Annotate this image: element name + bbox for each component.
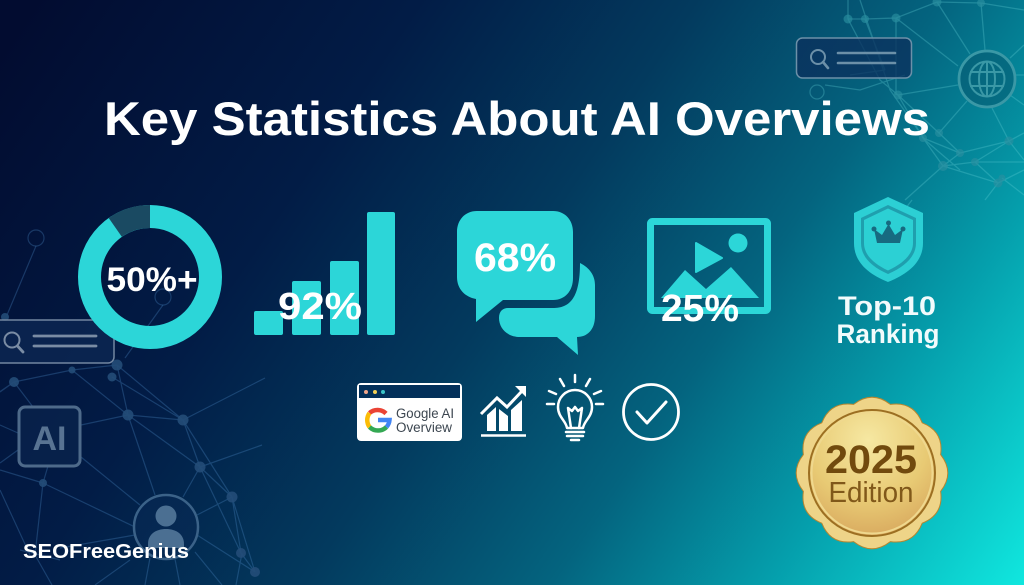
network: lower left	[0, 230, 265, 585]
stat: 68% speech bubbles: 68%	[474, 236, 556, 280]
search bar: left	[0, 320, 114, 363]
network: upper right	[810, 0, 1024, 222]
AI chip icon	[19, 407, 80, 466]
stat: top-10 ranking shield: Ranking	[836, 319, 940, 349]
icon: light bulb	[547, 375, 603, 440]
badge: 2025 Edition: 2025	[825, 438, 917, 482]
stat: 25% image frame	[650, 222, 768, 330]
stat: top-10 ranking shield	[836, 197, 940, 349]
badge: 2025 Edition: Edition	[828, 477, 914, 509]
stat: 50%+ donut: 50%+	[106, 261, 198, 299]
badge: 2025 Edition	[796, 397, 948, 549]
stat: 92% bar chart: 92%	[278, 286, 362, 328]
brand name: SEOFreeGenius	[23, 541, 189, 563]
icon: Google AI Overview card: Google AI	[396, 406, 454, 421]
icon: check circle	[624, 384, 678, 440]
stat: 25% image frame: 25%	[661, 288, 739, 330]
stat: 68% speech bubbles	[457, 211, 595, 355]
icon: Google AI Overview card	[357, 383, 462, 441]
globe icon	[959, 51, 1015, 107]
AI chip icon: AI	[32, 420, 66, 458]
stat: 92% bar chart	[254, 212, 395, 335]
icon: Google AI Overview card: Overview	[396, 420, 452, 435]
search bar: top right	[796, 38, 912, 78]
icon: growth chart	[481, 386, 526, 436]
stat: top-10 ranking shield: Top-10	[838, 291, 936, 321]
user avatar icon	[134, 495, 198, 559]
stat: 50%+ donut	[90, 216, 210, 338]
title: Key Statistics About AI Overviews	[104, 92, 930, 145]
